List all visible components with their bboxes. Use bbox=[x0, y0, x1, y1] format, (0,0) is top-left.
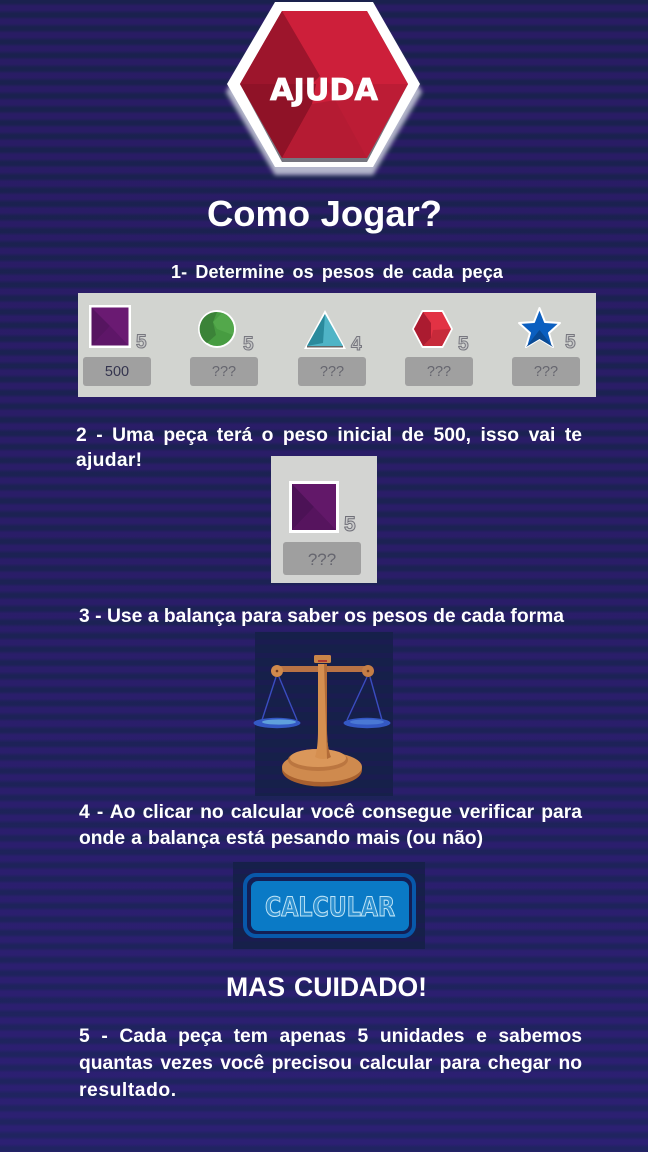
button: calcular bbox=[233, 862, 425, 949]
input: circle weight: ??? bbox=[212, 364, 236, 380]
left strings bbox=[262, 677, 297, 720]
piece: teal triangle bbox=[304, 310, 346, 349]
warning heading: MAS CUIDADO! bbox=[226, 972, 427, 1002]
step 1 heading: 1- Determine os pesos de cada peça bbox=[171, 262, 503, 282]
count: star: 5 bbox=[565, 332, 576, 353]
input: square weight bbox=[83, 357, 151, 386]
input: hexagon weight: ??? bbox=[427, 364, 451, 380]
step 2 text: 2 - Uma peça terá o peso inicial de 500, isso vai te bbox=[76, 425, 582, 446]
panel: pieces row bbox=[78, 293, 596, 397]
count: hexagon: 5 bbox=[458, 334, 469, 355]
piece: purple square bbox=[89, 305, 131, 348]
input: hexagon weight bbox=[405, 357, 473, 386]
right pan bbox=[344, 718, 390, 728]
piece: green circle bbox=[198, 310, 236, 348]
panel: starting piece bbox=[271, 456, 377, 583]
input: triangle weight: ??? bbox=[320, 364, 344, 380]
input: star weight bbox=[512, 357, 580, 386]
right strings bbox=[347, 677, 382, 720]
input: star weight: ??? bbox=[534, 364, 558, 380]
step 5 text: 5 - Cada peça tem apenas 5 unidades e sabemos bbox=[79, 1026, 582, 1047]
count: 5 bbox=[344, 513, 356, 536]
step 4 text bbox=[79, 802, 582, 849]
count: circle: 5 bbox=[243, 334, 254, 355]
step 3 text: 3 - Use a balança para saber os pesos de cada forma bbox=[79, 606, 564, 627]
base bbox=[282, 754, 362, 786]
beam bbox=[277, 666, 368, 672]
step 2 text bbox=[76, 425, 582, 471]
icon: red AJUDA hexagon badge bbox=[226, 2, 422, 175]
left pan bbox=[254, 718, 300, 728]
input: triangle weight bbox=[298, 357, 366, 386]
input: ??? bbox=[308, 550, 336, 569]
step 4 text: onde a balança está pesando mais (ou não) bbox=[79, 828, 483, 849]
input: square weight: 500 bbox=[105, 364, 129, 380]
step 4 text: 4 - Ao clicar no calcular você consegue verificar para bbox=[79, 802, 582, 823]
button: calcular: CALCULAR bbox=[265, 892, 395, 923]
piece: blue star bbox=[519, 308, 560, 347]
step 5 text bbox=[79, 1026, 582, 1101]
count: square: 5 bbox=[136, 332, 147, 353]
step 5 text: resultado. bbox=[79, 1080, 177, 1101]
title: Como Jogar? bbox=[207, 193, 442, 234]
piece: large purple square bbox=[289, 481, 339, 533]
piece: red hexagon bbox=[412, 310, 453, 348]
icon: balance scale bbox=[254, 632, 393, 796]
badge label: AJUDA bbox=[270, 73, 379, 108]
input: circle weight bbox=[190, 357, 258, 386]
count: triangle: 4 bbox=[351, 334, 362, 355]
step 5 text: quantas vezes você precisou calcular para chegar no bbox=[79, 1053, 582, 1074]
post bbox=[315, 664, 331, 759]
step 2 text: ajudar! bbox=[76, 450, 142, 471]
